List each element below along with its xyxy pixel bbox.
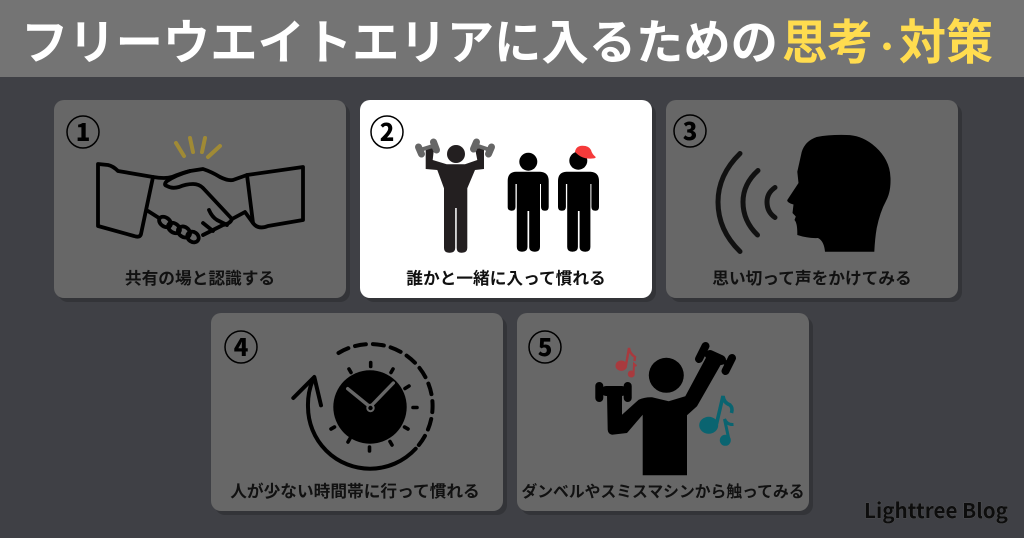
icon: sound waves [718,154,775,252]
title banner: フリーウエイトエリアに入るための [21,3,778,73]
blog credit: Lighttree Blog [864,494,1008,524]
number 4 [225,328,257,363]
label 4: 人が少ない時間帯に行って慣れる [230,478,480,502]
icon: standing person [508,153,549,252]
number 5: 5 [538,328,552,363]
icon: speaking head [787,135,891,252]
title banner: 思考 [782,3,873,73]
title banner: 対策 [899,3,993,73]
label 1: 共有の場と認識する [125,265,275,289]
label 2: 誰かと一緒に入って慣れる [406,265,606,289]
panel: 2 go together (highlighted) [360,100,656,302]
number 5 [529,328,561,363]
panel: 3 speak up [666,100,962,302]
icon: red music notes [616,348,636,378]
label 5: ダンベルやスミスマシンから触ってみる [521,479,805,502]
icon: person with raised dumbbells [599,346,732,475]
number 3 [674,112,706,147]
panel: 1 shared space [54,100,350,302]
label 3: 思い切って声をかけてみる [712,265,912,289]
number 4: 4 [234,328,248,363]
icon: handshake [98,164,303,245]
title banner [0,0,1024,77]
number 2: 2 [380,113,394,148]
icon: person with red cap [558,146,599,252]
title banner: ・ [872,23,902,67]
icon: clock with arrow [293,344,433,469]
number 1: 1 [76,113,90,148]
icon: man lifting dumbbells [418,142,492,253]
panel: 5 dumbbells and machines [517,313,813,515]
icon: teal music notes [699,396,734,446]
panel: 4 off-peak hours [211,313,507,515]
number 1 [67,113,99,148]
number 3: 3 [683,112,697,147]
number 2 [371,113,403,148]
icon: gold sparkle [176,138,220,157]
